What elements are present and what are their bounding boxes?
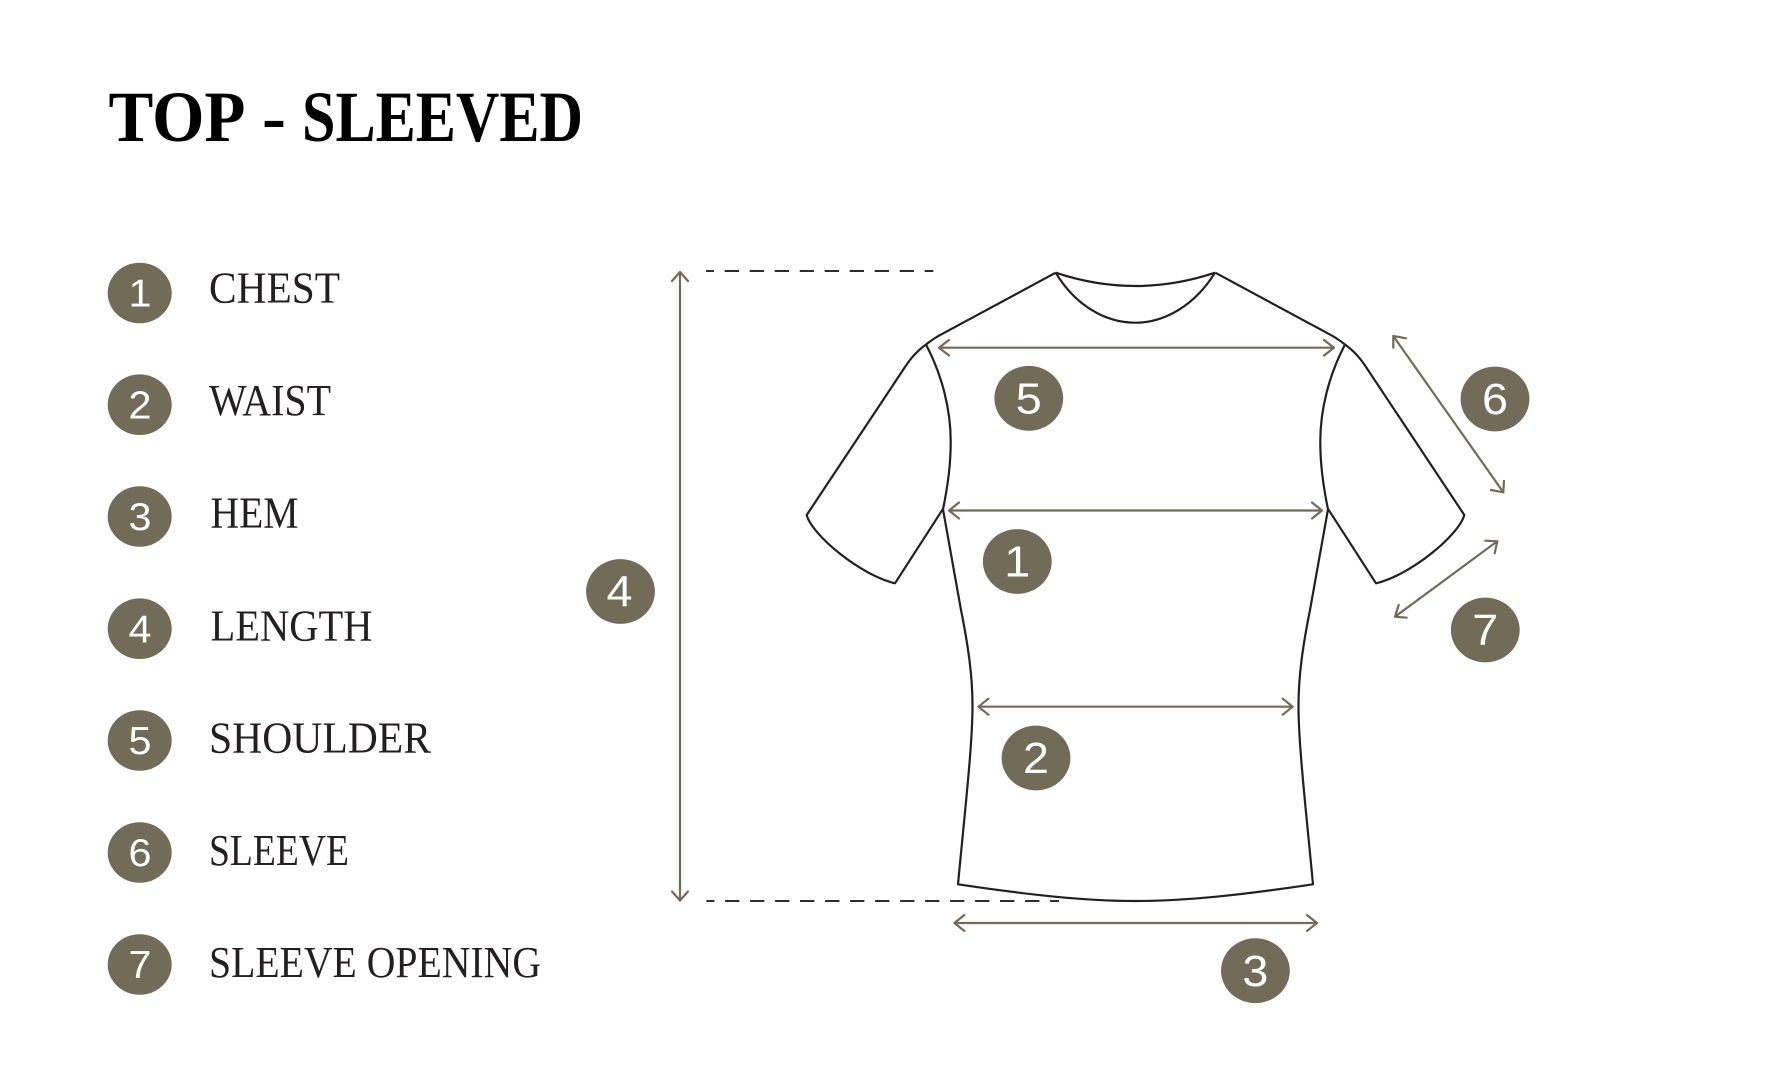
marker 7: 7 [1472, 606, 1498, 655]
legend item 4: length: LENGTH [210, 601, 372, 650]
marker 5: 5 [1016, 374, 1042, 424]
legend item 6: sleeve: 6 [128, 832, 152, 875]
marker 3 [1221, 938, 1290, 1003]
marker 2 [1002, 726, 1070, 790]
marker 6 [1461, 367, 1529, 431]
marker 1 [983, 529, 1052, 594]
arrow: length [672, 272, 688, 900]
left half: shoulder, sleeve, armhole, side, hem [807, 273, 1136, 901]
legend item 7: sleeve opening: SLEEVE OPENING [209, 938, 541, 987]
arrow: hem [954, 915, 1317, 931]
marker 5 [994, 366, 1063, 431]
legend item 1: chest [108, 263, 340, 323]
legend item 2: waist: WAIST [209, 376, 331, 425]
legend item 4: length [108, 598, 372, 659]
legend item 7: sleeve opening: 7 [128, 944, 152, 987]
arrow: chest [949, 502, 1322, 518]
marker 4 [586, 559, 655, 624]
marker 2: 2 [1023, 734, 1049, 783]
legend [108, 263, 541, 995]
marker 6: 6 [1482, 375, 1508, 424]
legend item 2: waist [108, 374, 331, 435]
top dashed guide [706, 270, 933, 272]
right half: shoulder, sleeve, armhole, side, hem [1136, 273, 1464, 901]
legend item 6: sleeve [108, 822, 349, 883]
legend item 3: hem [108, 486, 298, 547]
arrow: shoulder [939, 340, 1334, 356]
title: SLEEVED [302, 77, 583, 157]
bottom dashed guide [706, 900, 1059, 902]
marker 4: 4 [606, 568, 632, 617]
marker 3: 3 [1242, 947, 1268, 996]
arrow: sleeve opening [1395, 541, 1497, 618]
legend item 5: shoulder: 5 [128, 720, 152, 763]
collar [1056, 273, 1215, 323]
title: - [262, 77, 286, 157]
legend item 7: sleeve opening [108, 934, 541, 995]
legend item 6: sleeve: SLEEVE [209, 826, 349, 875]
legend item 3: hem: 3 [128, 496, 152, 539]
title [108, 77, 583, 157]
legend item 4: length: 4 [128, 608, 152, 651]
legend item 1: chest: CHEST [209, 264, 340, 313]
legend item 2: waist: 2 [128, 384, 152, 427]
marker 1: 1 [1004, 538, 1030, 587]
legend item 5: shoulder [108, 710, 432, 771]
marker 7 [1451, 598, 1520, 662]
legend item 3: hem: HEM [210, 489, 298, 538]
title: TOP [108, 77, 246, 157]
legend item 5: shoulder: SHOULDER [209, 714, 432, 763]
legend item 1: chest: 1 [128, 273, 152, 316]
arrow: waist [978, 699, 1293, 715]
t-shirt outline [807, 273, 1464, 901]
arrow: sleeve [1393, 336, 1504, 492]
